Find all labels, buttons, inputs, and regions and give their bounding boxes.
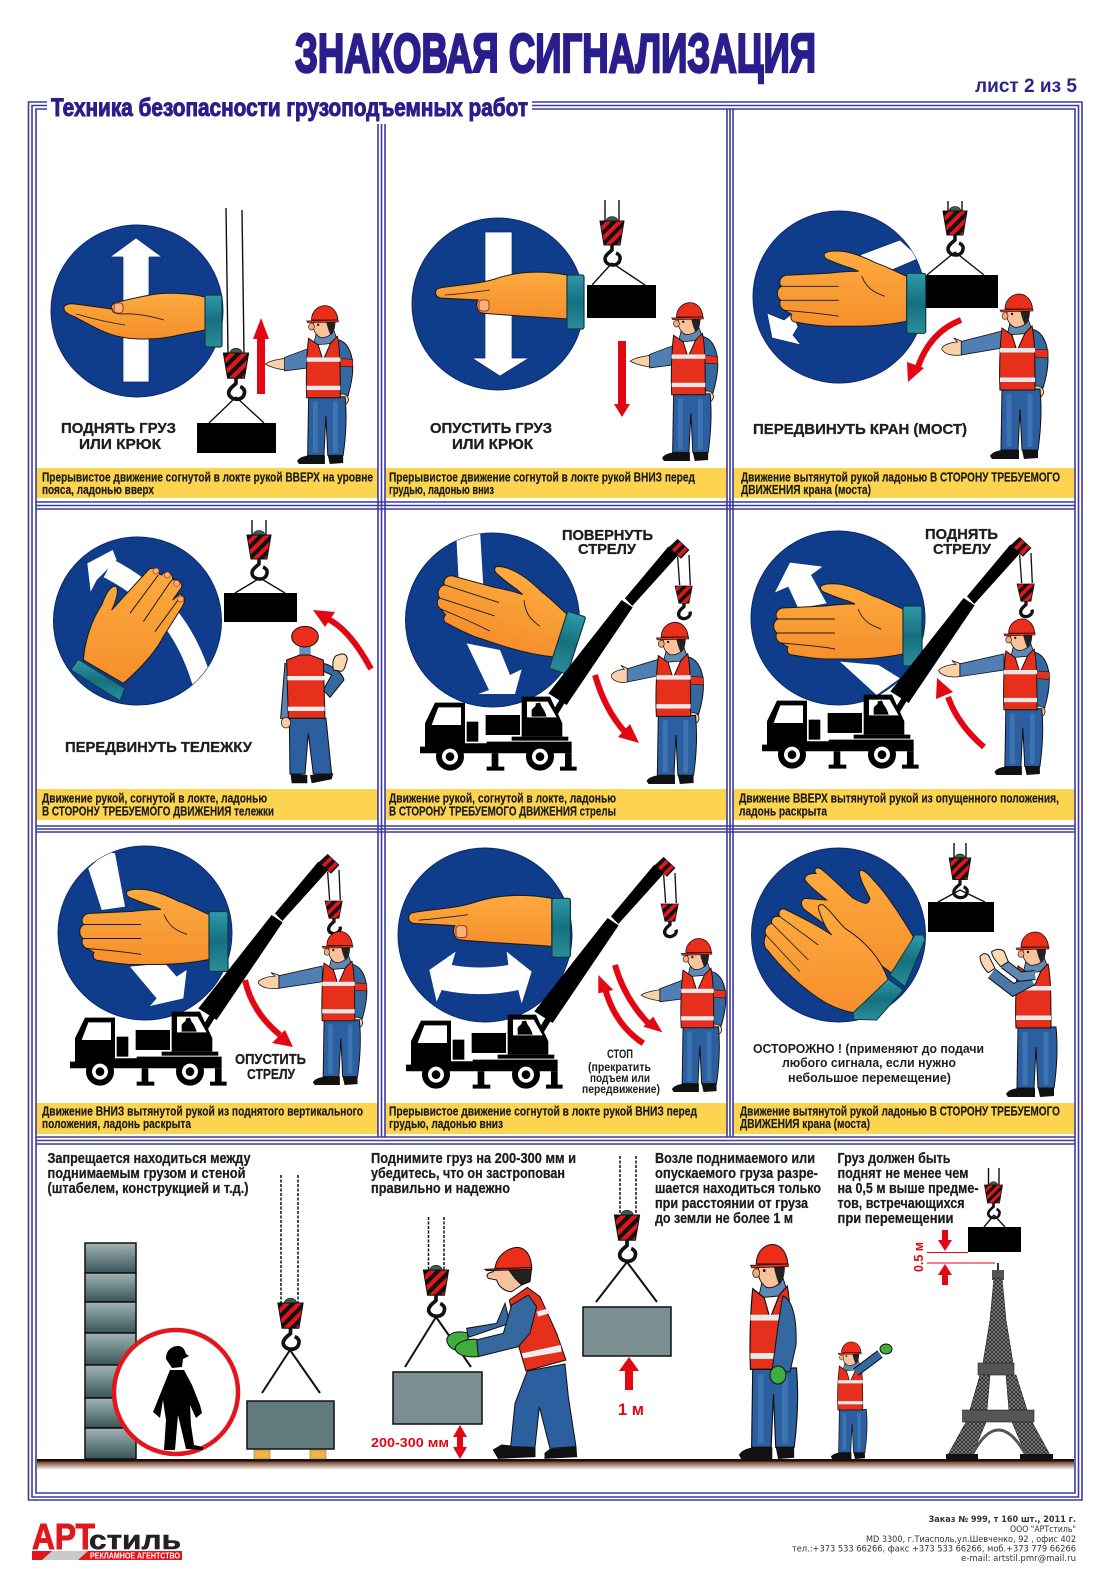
panel: move crane (741, 201, 1060, 497)
worker (980, 932, 1057, 1097)
small worker (831, 1342, 892, 1459)
caption (42, 470, 373, 497)
hook and load (587, 200, 656, 318)
rule text 4: на 0,5 м выше предме- (838, 1181, 979, 1197)
title: ЗНАКОВАЯ СИГНАЛИЗАЦИЯ (295, 22, 816, 84)
label: ОПУСТИТЬ (235, 1051, 306, 1068)
icon: caution sign (752, 848, 926, 1022)
caption: В СТОРОНУ ТРЕБУЕМОГО ДВИЖЕНИЯ стрелы (389, 804, 616, 818)
arrow: curved up-left (936, 678, 984, 747)
panel: caution (740, 843, 1060, 1131)
label: СТРЕЛУ (247, 1066, 296, 1083)
small hook and load (968, 1168, 1021, 1252)
icon: raise sign (51, 225, 223, 397)
arrow: up (253, 318, 269, 394)
caption (42, 792, 274, 818)
wall of blocks (85, 1243, 136, 1459)
panel: raise load (42, 208, 373, 497)
arrow: curved down-right (595, 675, 639, 743)
yellow caption bands (36, 468, 1075, 1134)
label: ИЛИ КРЮК (79, 436, 162, 453)
label (235, 1051, 306, 1083)
rule text 3: Возле поднимаемого или (655, 1151, 815, 1167)
rule text 2: Поднимите груз на 200-300 мм и (371, 1151, 576, 1167)
icon: lower boom sign (58, 846, 232, 1020)
rule text 1 (48, 1151, 250, 1197)
caption: пояса, ладонью вверх (42, 483, 154, 497)
worker (630, 303, 718, 461)
rule text 4: тов, встречающихся (838, 1196, 964, 1212)
caption: Прерывистое движение согнутой в локте рукой ВНИЗ перед (389, 1104, 697, 1118)
hook and load (928, 843, 994, 932)
logo: АРТ (32, 1516, 95, 1557)
rule text 4 (838, 1151, 979, 1227)
caption (740, 1104, 1060, 1131)
worker (611, 622, 703, 784)
imprint (792, 1515, 1076, 1564)
rule text 3: шается находиться только (655, 1181, 821, 1197)
label: ПОДНЯТЬ ГРУЗ (61, 420, 176, 437)
caption (389, 470, 695, 497)
crane truck (420, 539, 692, 771)
label: (прекратить (588, 1062, 651, 1074)
label (430, 420, 552, 453)
imprint: e-mail: artstil.pmr@mail.ru (961, 1554, 1076, 1564)
caption: Движение ВНИЗ вытянутой рукой из поднятого вертикального (42, 1104, 363, 1118)
label (562, 527, 653, 558)
worker (641, 939, 726, 1092)
icon: rotate sign (406, 530, 593, 707)
rule text 4: при перемещении (838, 1211, 954, 1227)
worker (265, 306, 353, 464)
hook with load above (583, 1156, 671, 1356)
sheet number: лист 2 из 5 (975, 76, 1077, 97)
worker (939, 619, 1049, 775)
caption: Прерывистое движение согнутой в локте рукой ВВЕРХ на уровне (42, 470, 373, 484)
dimension: 200-300 mm (371, 1425, 467, 1459)
dimension: 0.5 m (911, 1230, 995, 1285)
imprint: ООО "АРТстиль" (1010, 1525, 1076, 1535)
label: ОСТОРОЖНО ! (применяют до подачи (753, 1041, 984, 1056)
ground (37, 1459, 1074, 1470)
caption: Движение рукой, согнутой в локте, ладонью (42, 792, 267, 806)
label: ПЕРЕДВИНУТЬ КРАН (МОСТ) (753, 421, 967, 438)
dimension: 0.5 m: 0.5 м (911, 1242, 926, 1272)
icon: lower sign (412, 218, 584, 390)
eiffel tower (946, 1263, 1053, 1459)
imprint: MD 3300, г.Тиасполь,ул.Шевченко, 92 , офис 402 (866, 1535, 1076, 1545)
caption (389, 1104, 697, 1131)
worker (258, 932, 367, 1085)
panel: safety rules (37, 1151, 1074, 1470)
tall worker (739, 1244, 798, 1459)
arrow: curved up-left (313, 610, 371, 669)
label (61, 420, 176, 453)
worker back view (281, 626, 347, 783)
label: передвижение) (582, 1084, 660, 1096)
panel: rotate boom (389, 527, 703, 818)
logo: РЕКЛАМНОЕ АГЕНТСТВО (90, 1552, 180, 1560)
caption (42, 1104, 363, 1131)
hook and load (224, 520, 297, 622)
imprint: тел.:+373 533 66266, факс +373 533 66266, моб.+373 779 66266 (792, 1544, 1076, 1554)
arrow: curved left-down (907, 320, 961, 382)
caption: В СТОРОНУ ТРЕБУЕМОГО ДВИЖЕНИЯ тележки (42, 804, 274, 818)
logo: стиль (89, 1525, 181, 1555)
panel: stop (389, 848, 726, 1131)
panel: raise boom (739, 526, 1059, 818)
caption (741, 470, 1060, 497)
caption: грудью, ладонью вниз (389, 483, 494, 497)
caption: Прерывистое движение согнутой в локте рукой ВНИЗ перед (389, 470, 695, 484)
rule text 4: Груз должен быть (838, 1151, 951, 1167)
label: любого сигнала, если нужно (782, 1055, 956, 1070)
label: небольшое перемещение) (788, 1070, 951, 1085)
rule text 2: правильно и надежно (371, 1181, 510, 1197)
rule text 3: до земли не более 1 м (655, 1211, 793, 1227)
hook and load (920, 201, 998, 308)
worker (942, 294, 1048, 459)
bending worker (447, 1247, 577, 1458)
caption (389, 792, 616, 818)
rule text 3: при расстоянии от груза (655, 1196, 809, 1212)
label: ИЛИ КРЮК (452, 436, 534, 453)
icon: crane sign (753, 211, 926, 383)
label (582, 1049, 660, 1096)
label: СТОП (607, 1049, 633, 1061)
caption: положения, ладонь раскрыта (42, 1117, 192, 1131)
arrow: down (614, 341, 630, 417)
label (925, 526, 998, 558)
load being checked (393, 1217, 482, 1424)
dimension: 200-300 mm: 200-300 мм (371, 1435, 449, 1450)
rule text 3 (655, 1151, 821, 1227)
rule text 1: Запрещается находиться между (48, 1151, 250, 1167)
panel: lower load (389, 200, 718, 497)
arrows: down and up (598, 965, 662, 1043)
crane truck (70, 854, 342, 1086)
crane truck (762, 537, 1034, 769)
icon: trolley sign (54, 537, 222, 713)
caption: ДВИЖЕНИЯ крана (моста) (741, 483, 871, 497)
label (753, 1041, 984, 1085)
panel: lower boom (42, 846, 367, 1131)
caption (739, 792, 1059, 818)
icon: raise boom sign (751, 531, 925, 705)
label: СТРЕЛУ (933, 541, 992, 558)
rule text 4: поднят не менее чем (838, 1166, 968, 1182)
rule text 2: убедитесь, что он застропован (371, 1166, 565, 1182)
rule text 2 (371, 1151, 576, 1197)
subtitle: Техника безопасности грузоподъемных работ (51, 94, 528, 122)
dimension: 1 m: 1 м (618, 1400, 644, 1419)
logo (32, 1516, 182, 1560)
label: ПЕРЕДВИНУТЬ ТЕЛЕЖКУ (65, 739, 253, 756)
dimension: 1 m (618, 1357, 644, 1419)
caption: грудью, ладонью вниз (389, 1117, 503, 1131)
imprint: Заказ № 999, т 160 шт., 2011 г. (928, 1515, 1076, 1525)
hook and load (197, 208, 276, 453)
label: подъем или (590, 1073, 650, 1085)
crane truck (406, 857, 678, 1089)
arrow: curved down-right (245, 980, 293, 1047)
label: ОПУСТИТЬ ГРУЗ (430, 420, 552, 437)
forbidden zone with silhouette (114, 1330, 238, 1454)
panel: move trolley (42, 520, 371, 818)
label: СТРЕЛУ (578, 541, 637, 558)
caption: ладонь раскрыта (739, 804, 828, 818)
icon: stop sign (398, 848, 572, 1022)
rule text 1: поднимаемым грузом и стеной (48, 1166, 246, 1182)
caption: ДВИЖЕНИЯ крана (моста) (740, 1117, 870, 1131)
label: ПОВЕРНУТЬ (562, 527, 653, 544)
suspended load on supports (247, 1175, 334, 1459)
caption: Движение рукой, согнутой в локте, ладонью (389, 792, 616, 806)
rule text 3: опускаемого груза разре- (655, 1166, 818, 1182)
rule text 1: (штабелем, конструкцией и т.д.) (48, 1181, 249, 1197)
label: ПОДНЯТЬ (925, 526, 998, 543)
